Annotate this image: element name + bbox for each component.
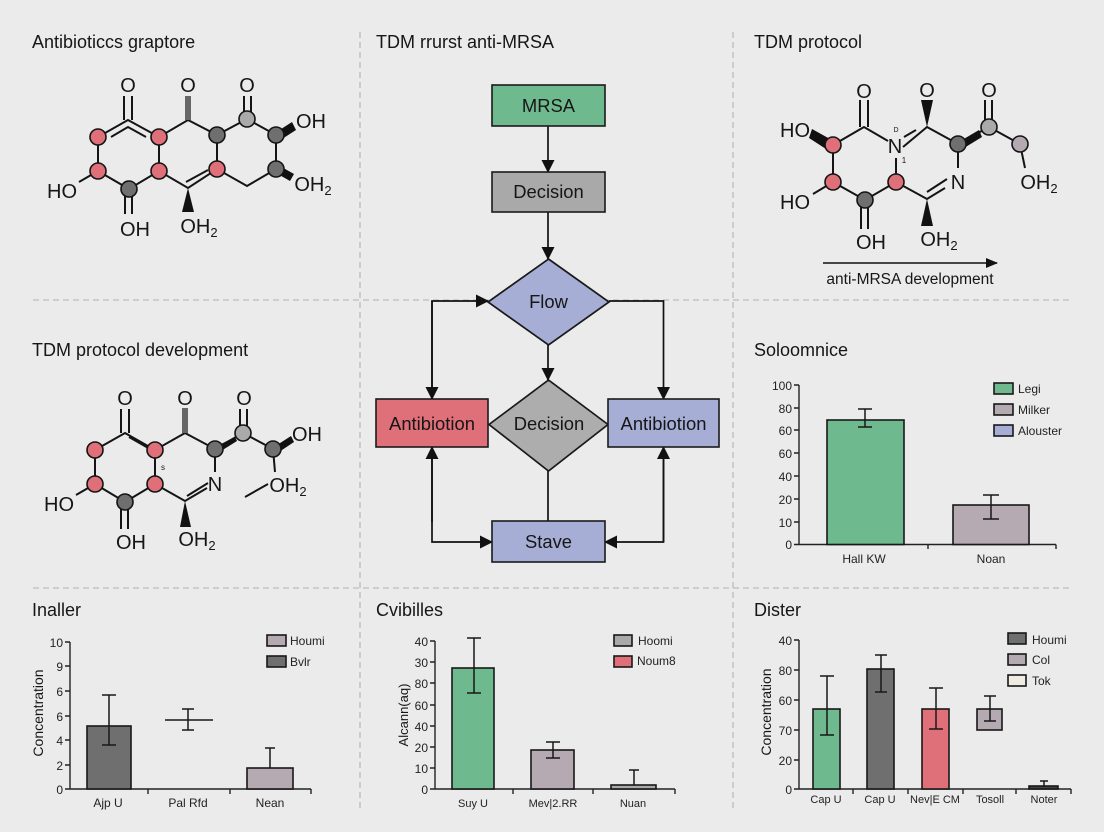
molecule: nitrogen ring structure: 2 — [1050, 181, 1058, 196]
diamond: Decision — [489, 380, 608, 471]
molecule: nitrogen ring structure: OH — [856, 232, 886, 254]
molecule: nitrogen ring structure: HO — [780, 192, 810, 214]
legend — [267, 634, 325, 669]
chart: axes: Concentration — [30, 669, 46, 757]
chart: axes — [772, 379, 1056, 566]
chart: axes: 40 — [779, 470, 792, 484]
molecule: nitrogen ring structure: D — [893, 127, 899, 134]
connectors: flowchart arrows — [432, 126, 664, 542]
bar: Ajp U — [87, 695, 131, 789]
molecule: three-ring structure: OH — [180, 216, 210, 238]
chart: axes: 80 — [779, 402, 792, 416]
chart: axes: 6 — [56, 710, 63, 724]
panel: Soloomnice bar chart — [754, 340, 1062, 566]
molecule: fused ring with side chain: OH — [292, 424, 322, 446]
chart: axes: Nev|E CM — [910, 794, 960, 806]
box: Antibiotion blue: Antibiotion — [621, 413, 706, 434]
heading: Cvibilles: Cvibilles — [376, 600, 443, 620]
legend: Legi — [1018, 382, 1041, 396]
molecule: three-ring structure — [47, 75, 332, 241]
chart: axes: 10 — [50, 636, 63, 650]
legend — [994, 382, 1062, 438]
heading: TDM protocol development: TDM protocol development — [32, 340, 248, 360]
molecule: fused ring with side chain: HO — [44, 494, 74, 516]
legend — [1008, 633, 1067, 688]
legend: Milker — [1018, 403, 1050, 417]
bar: Tosoll — [977, 696, 1002, 730]
molecule: nitrogen ring structure: 1 — [902, 156, 907, 165]
chart: axes: Noan — [977, 552, 1005, 566]
panel: antibiotics graptore — [32, 32, 332, 241]
molecule: three-ring structure: OH — [120, 219, 150, 241]
chart: axes — [396, 635, 675, 810]
legend: Hoomi — [638, 634, 673, 648]
chart: axes: 0 — [785, 538, 792, 552]
legend: Tok — [1032, 674, 1052, 688]
bar: Mev — [531, 742, 574, 789]
bar: Nean — [247, 748, 293, 789]
molecule: nitrogen ring structure: N — [888, 136, 902, 158]
box: Antibiotion red — [376, 399, 488, 447]
chart: axes: 0 — [785, 783, 792, 797]
arrowhead: development direction — [986, 258, 998, 268]
chart: axes: 0 — [421, 783, 428, 797]
diamond: Flow — [488, 259, 609, 345]
panel: TDM protocol — [754, 32, 1058, 288]
legend: Noum8 — [637, 654, 676, 668]
chart: axes: 6 — [56, 685, 63, 699]
chart: axes: Tosoll — [976, 794, 1004, 806]
chart: axes: Noter — [1031, 794, 1058, 806]
chart: axes: 60 — [415, 699, 428, 713]
molecule: three-ring structure: HO — [47, 181, 77, 203]
molecule: three-ring structure: O — [180, 75, 196, 97]
molecule: fused ring with side chain — [44, 388, 322, 554]
molecule: fused ring with side chain: 2 — [299, 484, 307, 499]
chart: axes: 80 — [415, 677, 428, 691]
box: Antibiotion red: Antibiotion — [389, 413, 475, 434]
molecule: nitrogen ring structure: O — [856, 81, 872, 103]
diamond: Flow: Flow — [529, 291, 569, 312]
diamond: Decision: Decision — [514, 413, 584, 434]
bar: Hall KW — [827, 409, 904, 544]
box: Antibiotion blue — [608, 399, 719, 447]
panel: Cvibilles bar chart — [376, 600, 676, 810]
bar: Noter — [1029, 781, 1058, 789]
heading: antibiotics graptore: Antibioticcs graptore — [32, 32, 195, 52]
chart: axes — [30, 636, 311, 810]
box: MRSA — [492, 85, 605, 126]
molecule: fused ring with side chain: N — [208, 474, 222, 496]
chart: axes — [758, 634, 1071, 806]
legend: Col — [1032, 653, 1050, 667]
chart: axes: 10 — [779, 516, 792, 530]
chart: axes: 40 — [415, 635, 428, 649]
bar: Nuan — [611, 770, 656, 789]
legend: Bvlr — [290, 655, 311, 669]
molecule: nitrogen ring structure: OH — [920, 229, 950, 251]
bar: Cap U gray — [867, 655, 894, 789]
chart: axes: Cap U — [864, 794, 896, 806]
heading: Soloomnice: Soloomnice — [754, 340, 848, 360]
molecule: three-ring structure: 2 — [210, 225, 218, 240]
molecule: three-ring structure: OH — [294, 174, 324, 196]
chart: axes: Concentration — [758, 668, 774, 756]
chart: axes: 20 — [415, 741, 428, 755]
chart: axes: Ajp U — [93, 796, 123, 810]
box: Decision: Decision — [513, 181, 584, 202]
heading: TDM rrurst anti-MRSA: TDM rrurst anti-MRSA — [376, 32, 554, 52]
molecule: fused ring with side chain: O — [236, 388, 252, 410]
molecule: fused ring with side chain: O — [117, 388, 133, 410]
legend — [614, 634, 676, 668]
molecule: fused ring with side chain: s — [161, 463, 165, 472]
chart: axes: Mev|2.RR — [529, 798, 577, 810]
molecule: three-ring structure: O — [120, 75, 136, 97]
molecule: nitrogen ring structure: O — [981, 80, 997, 102]
chart: axes: 10 — [415, 762, 428, 776]
chart: axes: Nean — [256, 796, 284, 810]
chart: axes: 100 — [772, 379, 792, 393]
chart: axes: Suy U — [458, 798, 488, 810]
molecule: fused ring with side chain: OH — [178, 529, 208, 551]
panel: Dister bar chart — [754, 600, 1071, 806]
bar: Suy U — [452, 638, 494, 789]
panel: TDM protocol development — [32, 340, 322, 554]
molecule: nitrogen ring structure — [780, 80, 1058, 254]
chart: axes: Cap U — [810, 794, 842, 806]
chart: axes: 80 — [779, 664, 792, 678]
bar: Nev E CM — [922, 688, 949, 789]
box: Stave — [492, 521, 605, 562]
box: MRSA: MRSA — [522, 95, 576, 116]
chart: axes: 0 — [56, 783, 63, 797]
bar: Cap U green — [813, 676, 840, 789]
legend: Houmi — [290, 634, 325, 648]
molecule: nitrogen ring structure: O — [919, 80, 935, 102]
chart: axes: 9 — [56, 660, 63, 674]
molecule: nitrogen ring structure: N — [951, 172, 965, 194]
molecule: three-ring structure: OH — [296, 111, 326, 133]
chart: axes: Pal Rfd — [168, 796, 208, 810]
chart: axes: 4 — [56, 734, 63, 748]
chart: axes: 2 — [56, 759, 63, 773]
chart: axes: Nuan — [620, 798, 646, 810]
legend: Houmi — [1032, 633, 1067, 647]
molecule: three-ring structure: O — [239, 75, 255, 97]
chart: axes: 30 — [415, 656, 428, 670]
panel: Inaller bar chart — [30, 600, 325, 810]
arrow: anti-MRSA development — [823, 262, 997, 264]
molecule: fused ring with side chain: 2 — [208, 538, 216, 553]
marker: Pal Rfd — [165, 709, 213, 730]
chart: axes: 40 — [415, 720, 428, 734]
chart: axes: Hall KW — [842, 552, 886, 566]
chart: axes: 20 — [779, 493, 792, 507]
chart: axes: 60 — [779, 694, 792, 708]
heading: TDM protocol: TDM protocol — [754, 32, 862, 52]
legend: Alouster — [1018, 424, 1062, 438]
molecule: fused ring with side chain: OH — [269, 475, 299, 497]
label: anti-MRSA development: anti-MRSA development — [826, 271, 994, 288]
heading: Dister: Dister — [754, 600, 801, 620]
chart: axes: Alcann(aq) — [396, 684, 411, 746]
molecule: nitrogen ring structure: 2 — [950, 238, 958, 253]
molecule: nitrogen ring structure: HO — [780, 120, 810, 142]
chart: axes: 40 — [779, 634, 792, 648]
chart: axes: 20 — [779, 754, 792, 768]
bar: Noan — [953, 495, 1029, 544]
molecule: three-ring structure: 2 — [324, 183, 332, 198]
chart: axes: 60 — [779, 424, 792, 438]
panel: flowchart TDM anti-MRSA — [376, 32, 719, 562]
chart: axes: 70 — [779, 724, 792, 738]
box: Stave: Stave — [525, 531, 572, 552]
chart: axes: 60 — [779, 447, 792, 461]
heading: Inaller: Inaller — [32, 600, 81, 620]
molecule: nitrogen ring structure: OH — [1020, 172, 1050, 194]
box: Decision — [492, 172, 605, 212]
molecule: fused ring with side chain: O — [177, 388, 193, 410]
molecule: fused ring with side chain: OH — [116, 532, 146, 554]
